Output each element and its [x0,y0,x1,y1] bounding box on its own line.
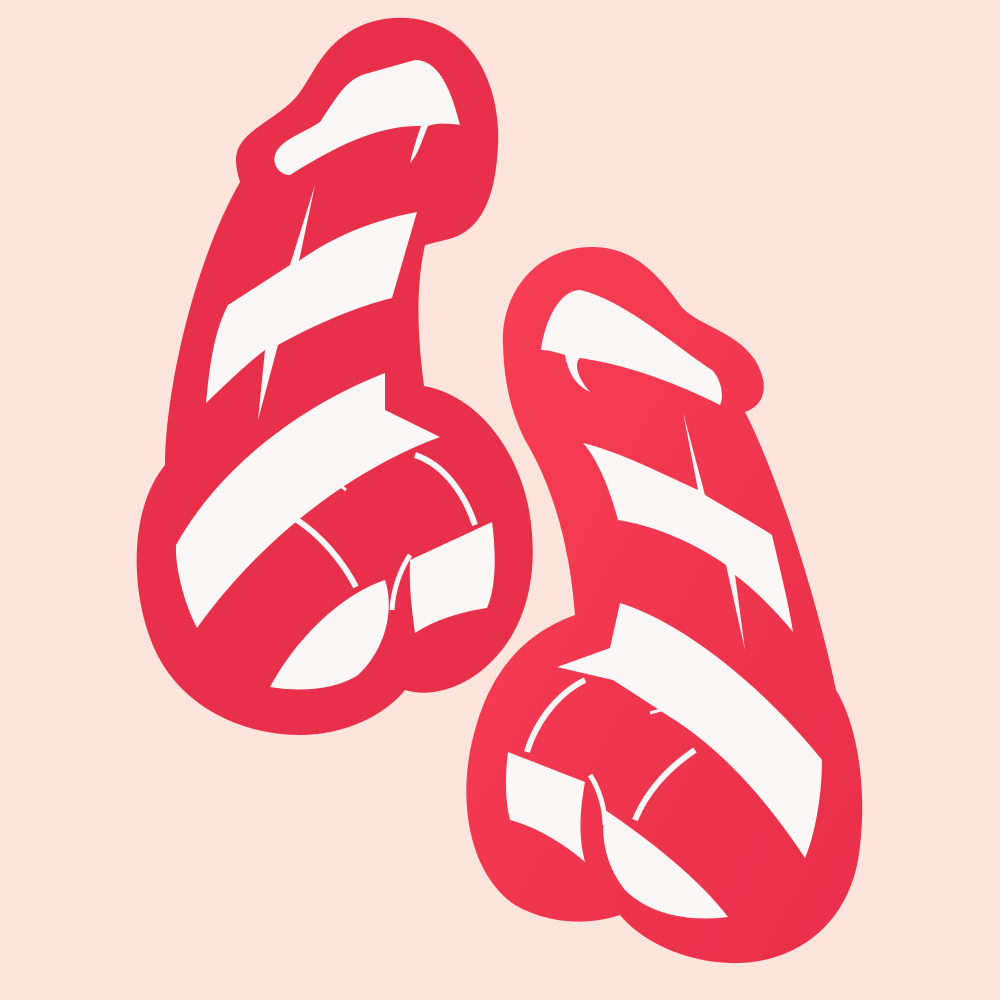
left sticker white stripes [176,60,495,689]
right sticker white stripes [506,290,822,919]
left sticker red base [137,18,533,735]
right sticker [466,247,862,963]
right sticker red base [466,247,862,963]
left sticker [137,18,533,735]
